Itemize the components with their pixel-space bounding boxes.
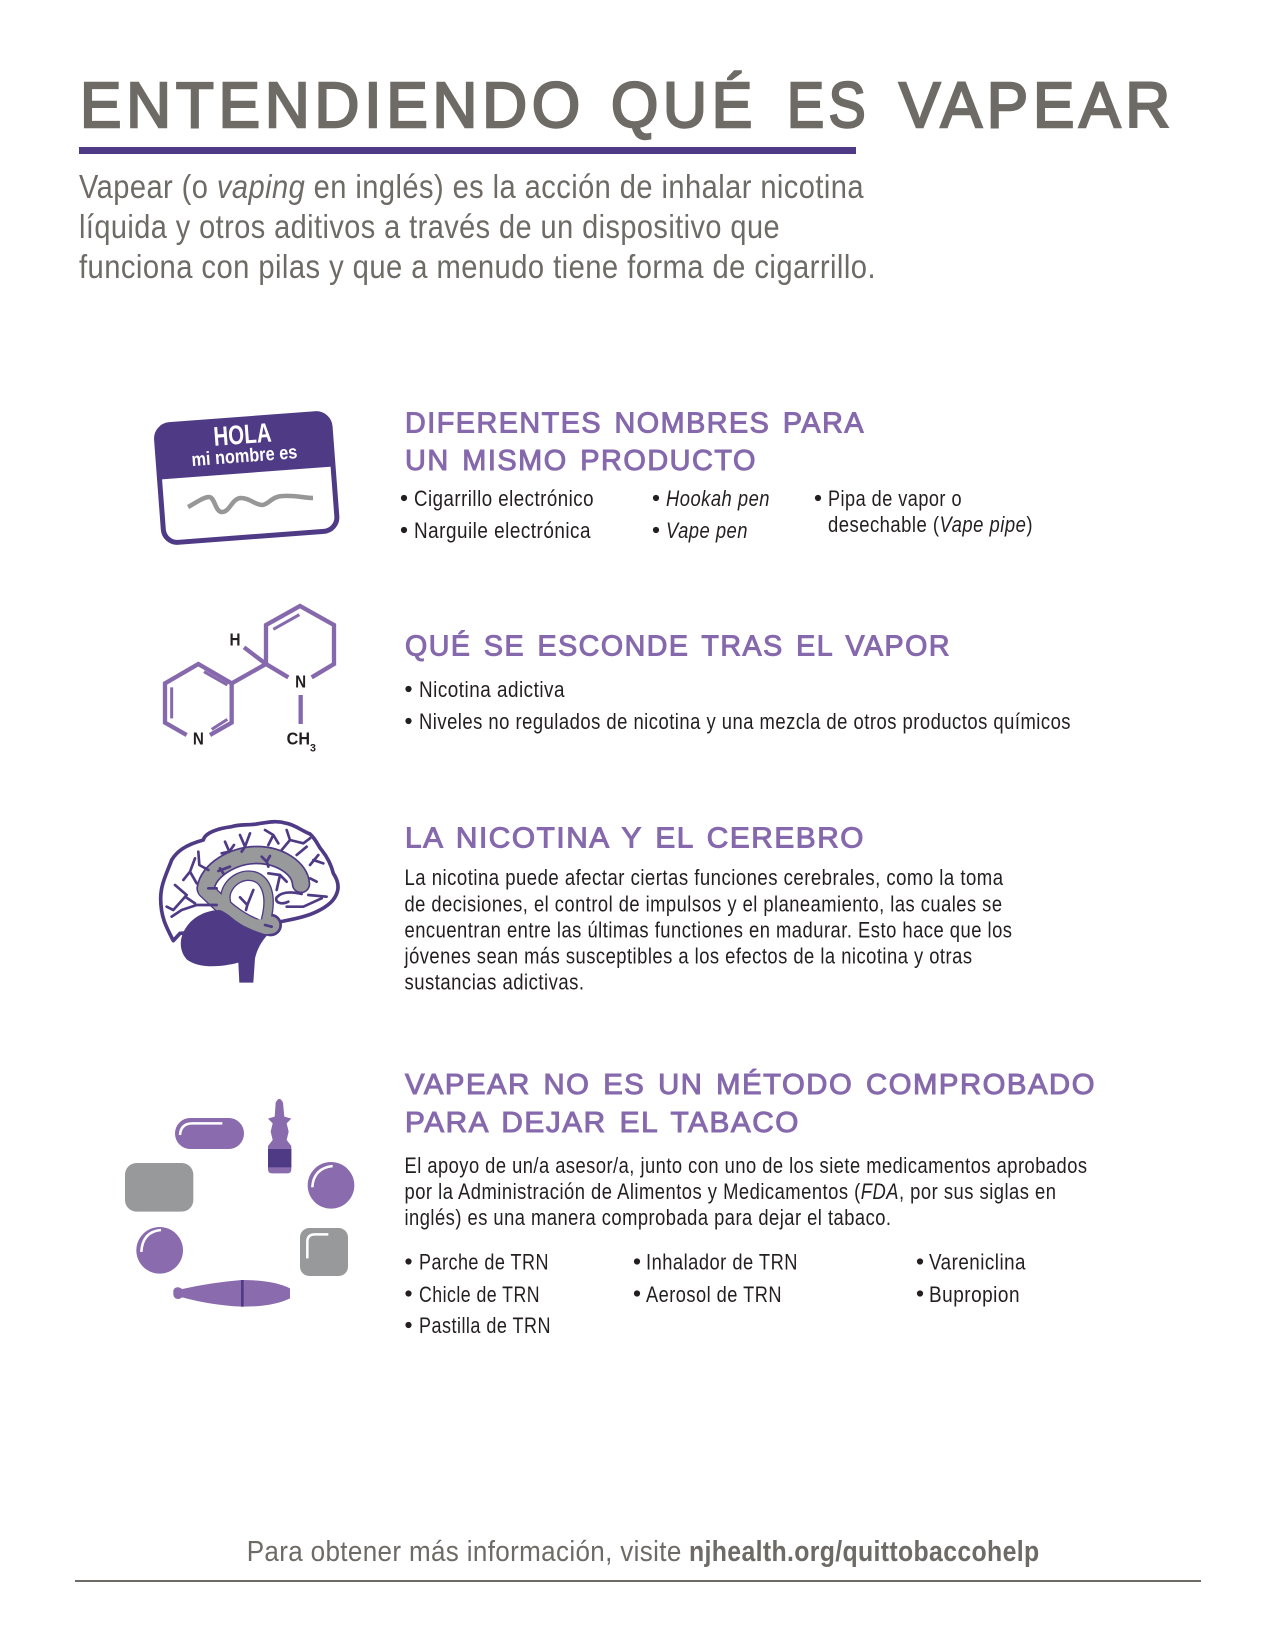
heading: nombres (405, 408, 865, 477)
text: método: inglés) es una manera comprobada para dejar el tabaco. (404, 1205, 892, 1230)
footer text: Para obtener más información, visite (247, 1536, 682, 1568)
icon: signature squiggle (188, 496, 313, 512)
capsule (175, 1118, 244, 1149)
title: ENTENDIENDO (80, 69, 585, 141)
list: nombres: Cigarrillo electrónico (414, 486, 594, 511)
list: medicamentos: Pastilla de TRN (419, 1313, 551, 1338)
heading: vapor: QUÉ SE ESCONDE TRAS EL VAPOR (405, 630, 951, 662)
list: vapor (405, 677, 1071, 734)
list: vapor: Nicotina adictiva (419, 677, 565, 702)
patch (125, 1163, 193, 1212)
icon: nicotine molecule: N (193, 728, 204, 748)
text: método (404, 1153, 1088, 1230)
round pill right (308, 1162, 354, 1209)
text: cerebro (404, 865, 1012, 994)
heading: nombres: DIFERENTES NOMBRES PARA (405, 408, 865, 440)
icon: nicotine molecule: N (295, 672, 306, 692)
heading: nombres: UN MISMO PRODUCTO (405, 445, 757, 477)
list: vapor: Niveles no regulados de nicotina y una mezcla de otros productos químicos (419, 709, 1071, 734)
title: ES (787, 69, 870, 141)
list: medicamentos: Inhalador de TRN (646, 1250, 798, 1274)
list: nombres: Pipa de vapor o (828, 486, 962, 511)
title underline (79, 147, 856, 154)
intro text: funciona con pilas y que a menudo tiene forma de cigarrillo. (79, 248, 876, 285)
icon: nicotine molecule (165, 606, 334, 754)
list: medicamentos: Bupropion (929, 1282, 1020, 1307)
icon: medications (125, 1099, 354, 1307)
round pill left (136, 1227, 183, 1274)
icon: name tag: HOLA (212, 418, 272, 452)
list: medicamentos: Parche de TRN (419, 1250, 549, 1274)
footer text: njhealth.org/quittobaccohelp (689, 1536, 1040, 1568)
icon: nicotine molecule: 3 (310, 742, 316, 754)
list: medicamentos (405, 1250, 1026, 1338)
heading: método (405, 1069, 1096, 1139)
icon: name tag: mi nombre es (191, 442, 298, 471)
text: cerebro: encuentran entre las últimas functiones en madurar. Esto hace que los (404, 918, 1012, 942)
text: cerebro: jóvenes sean más susceptibles a los efectos de la nicotina y otras (404, 944, 972, 968)
list: medicamentos: Aerosol de TRN (646, 1282, 782, 1307)
text: método: por la Administración de Alimentos y Medicamentos (FDA, por sus siglas en (404, 1179, 1056, 1204)
icon: brain (161, 822, 338, 983)
list: nombres: Narguile electrónica (414, 518, 591, 543)
list: nombres: Vape pen (666, 518, 748, 543)
text: método: El apoyo de un/a asesor/a, junto con uno de los siete medicamentos aprobados (404, 1153, 1088, 1178)
inhaler (173, 1280, 290, 1307)
title: QUÉ (611, 69, 757, 141)
icon: nicotine molecule: H (229, 629, 240, 649)
text: cerebro: sustancias adictivas. (404, 970, 584, 994)
icon: name tag (156, 413, 338, 543)
title: VAPEAR (899, 69, 1175, 141)
intro text: Vapear (o vaping en inglés) es la acción de inhalar nicotina (79, 168, 864, 205)
list: medicamentos: Vareniclina (929, 1250, 1026, 1274)
icon: nicotine molecule: CH (287, 728, 310, 748)
nasal spray (268, 1099, 291, 1173)
intro text (79, 168, 876, 285)
intro text: líquida y otros aditivos a través de un dispositivo que (79, 208, 780, 245)
list: nombres: desechable (Vape pipe) (828, 512, 1033, 537)
text: cerebro: La nicotina puede afectar ciertas funciones cerebrales, como la toma (404, 865, 1004, 890)
heading: cerebro: LA NICOTINA Y EL CEREBRO (405, 822, 865, 854)
footer rule (75, 1580, 1201, 1582)
list: nombres: Hookah pen (666, 486, 770, 511)
heading: método: VAPEAR NO ES UN MÉTODO COMPROBADO (405, 1069, 1096, 1101)
text: cerebro: de decisiones, el control de impulsos y el planeamiento, las cuales se (404, 892, 1002, 916)
list: medicamentos: Chicle de TRN (419, 1282, 540, 1307)
gum (300, 1228, 348, 1276)
list: nombres (401, 486, 1033, 543)
heading: método: PARA DEJAR EL TABACO (405, 1107, 800, 1139)
